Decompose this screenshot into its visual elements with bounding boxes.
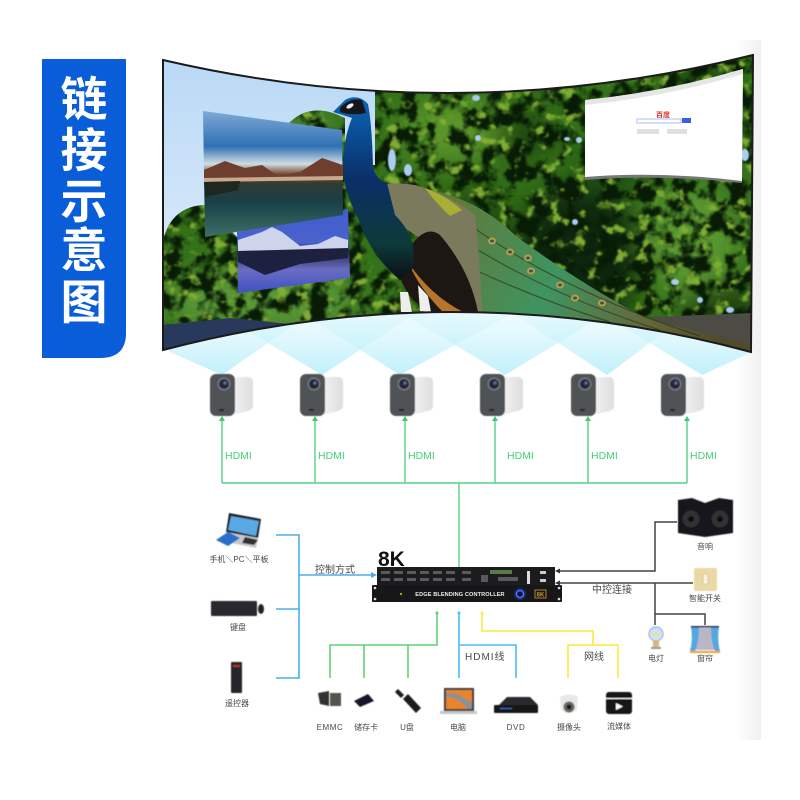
projector 2 <box>300 374 343 416</box>
streaming caption: 流媒体 <box>607 721 631 731</box>
floating mountain picture <box>237 209 350 293</box>
peacock legs <box>400 285 431 312</box>
controller rear unit <box>377 567 555 585</box>
green storage lines <box>330 612 438 678</box>
title text: 图 <box>60 276 108 329</box>
foliage background <box>164 56 752 325</box>
HDMI labels: HDMI <box>690 450 717 462</box>
central control lines <box>555 522 705 625</box>
icon: smart switch <box>694 568 717 591</box>
projector light beams <box>163 290 752 375</box>
controller device <box>372 567 562 602</box>
smart switch caption: 智能开关 <box>689 593 721 603</box>
curved projection screen <box>160 40 760 360</box>
HDMI labels: HDMI <box>507 450 534 462</box>
camera caption: 摄像头 <box>557 722 581 732</box>
memory card caption: 储存卡 <box>354 722 378 732</box>
projector 5 <box>571 374 614 416</box>
yellow network lines <box>480 612 618 678</box>
icon: DVD player <box>494 697 538 713</box>
controller name: EDGE BLENDING CONTROLLER <box>415 592 505 598</box>
icon: keyboard and mouse <box>211 601 264 616</box>
title text <box>60 73 108 329</box>
remote caption: 遥控器 <box>225 698 249 708</box>
tail eye spots <box>489 238 605 306</box>
icon: EMMC <box>318 691 341 706</box>
light caption: 电灯 <box>648 653 664 663</box>
DVD caption: DVD <box>507 723 525 732</box>
HDMI labels: HDMI <box>408 450 435 462</box>
background strip <box>735 40 761 740</box>
8K badge: 8K <box>537 592 545 598</box>
title text: 链 <box>60 73 108 126</box>
title tab <box>42 59 126 358</box>
projector 1 <box>210 374 253 416</box>
icon: streaming media <box>606 692 632 714</box>
laptop caption: 电脑 <box>450 722 466 732</box>
HDMI labels: HDMI <box>591 450 618 462</box>
HDMI cable label: HDMI线 <box>465 650 506 663</box>
8K label: 8K <box>378 548 405 571</box>
sky gaps <box>388 95 749 313</box>
title text: 意 <box>60 224 108 277</box>
projectors <box>210 374 704 416</box>
HDMI labels: HDMI <box>318 450 345 462</box>
control label: 控制方式 <box>315 563 355 576</box>
devices caption: 手机＼PC＼平板 <box>209 554 269 564</box>
controller front unit <box>372 585 562 602</box>
keyboard caption: 键盘 <box>230 622 246 632</box>
blue HDMI input lines <box>458 612 516 678</box>
title text: 示 <box>60 175 108 228</box>
icon: curtain <box>690 626 720 653</box>
icon: USB drive <box>395 689 421 713</box>
USB caption: U盘 <box>400 722 414 732</box>
projector 3 <box>390 374 433 416</box>
floating browser window <box>585 69 743 183</box>
projector 4 <box>480 374 523 416</box>
peacock back feathers <box>387 183 482 312</box>
EMMC caption: EMMC <box>317 723 343 732</box>
wood at lower left <box>164 318 286 349</box>
icon: memory card <box>354 694 374 707</box>
icon: light bulb <box>649 627 663 649</box>
icon: speakers <box>678 498 733 537</box>
icon: laptop <box>440 688 477 714</box>
peacock underside <box>398 232 478 312</box>
peacock neck and body <box>333 97 414 280</box>
icon: remote control <box>231 662 242 693</box>
tail feather strokes <box>470 225 700 336</box>
HDMI labels: HDMI <box>225 450 252 462</box>
HDMI labels <box>225 450 717 462</box>
title text: 接 <box>60 124 108 177</box>
curtain caption: 窗帘 <box>697 653 713 663</box>
power knob <box>514 588 526 600</box>
8K badge <box>535 590 546 598</box>
wood at lower right <box>650 313 750 344</box>
icon: camera <box>560 694 578 713</box>
icon: laptop, phone and tablet <box>216 513 261 548</box>
central control label: 中控连接 <box>592 583 632 596</box>
browser search logo: 百度 <box>656 110 670 119</box>
floating lake picture <box>203 111 343 237</box>
peacock tail <box>420 190 753 360</box>
control input lines <box>276 535 377 678</box>
projector 6 <box>661 374 704 416</box>
peacock <box>333 97 753 360</box>
network cable label: 网线 <box>584 650 604 663</box>
speakers caption: 音响 <box>697 541 713 551</box>
screen border <box>163 55 753 352</box>
HDMI green distribution lines <box>219 416 690 567</box>
